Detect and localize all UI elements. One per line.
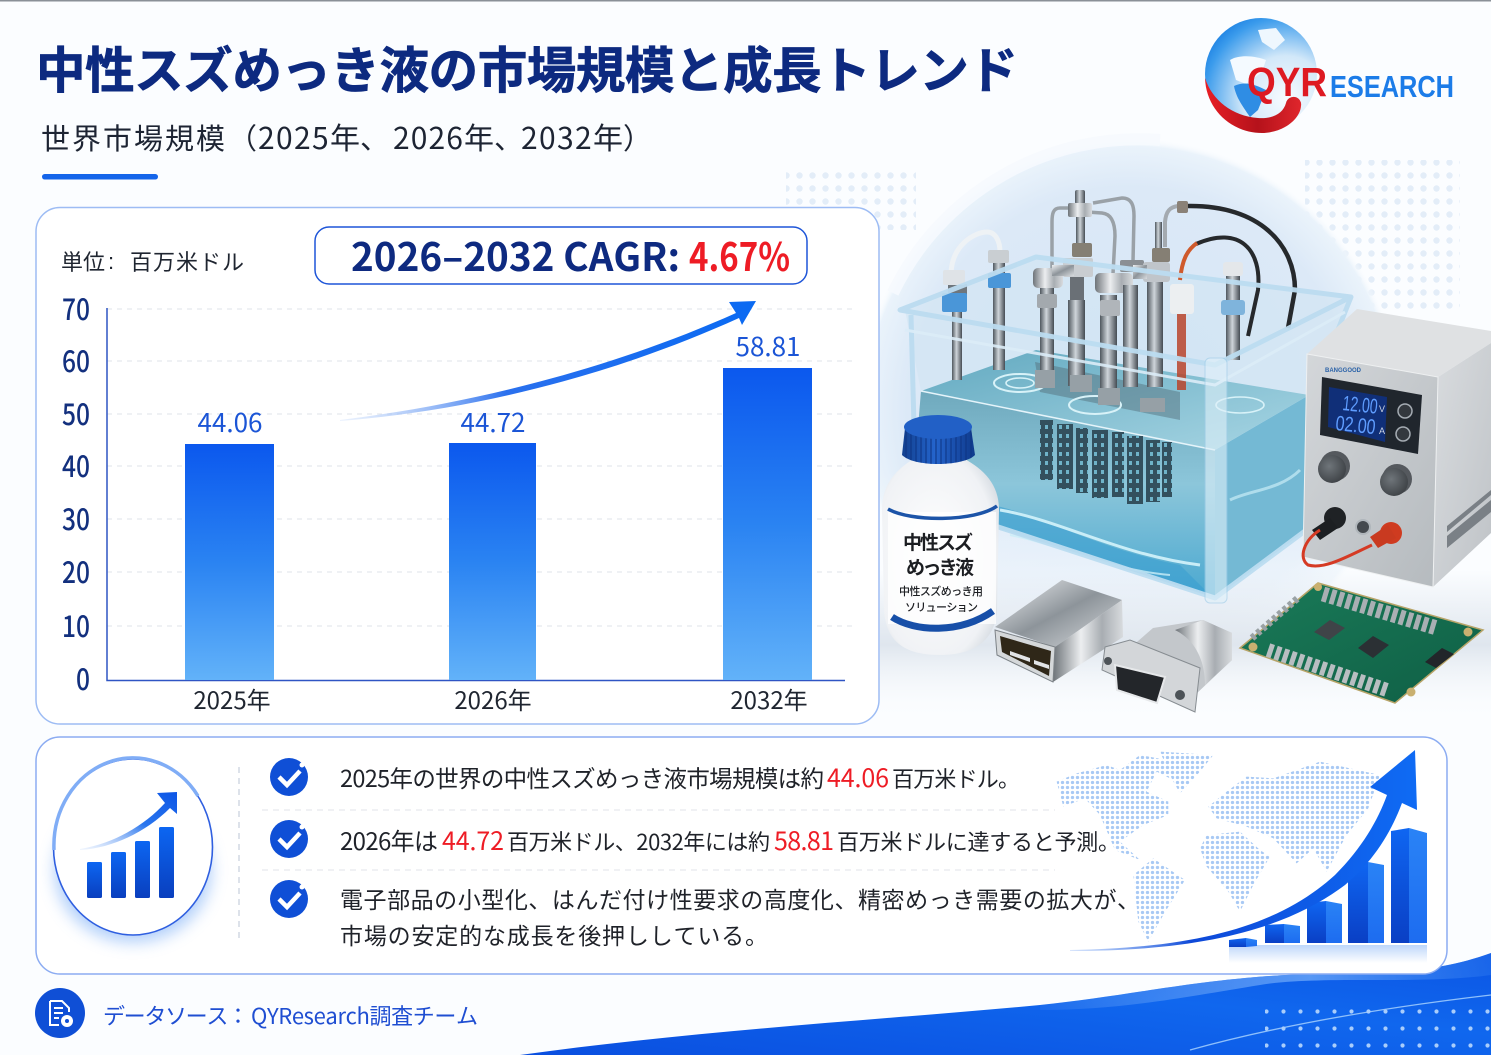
digital display: 12.00 — [1341, 392, 1379, 419]
takeaway 3: 電子部品の小型化、はんだ付け性要求の高度化、精密めっき需要の拡大が、 — [340, 881, 1140, 915]
big arrow — [1070, 750, 1417, 951]
panel: market size chart — [36, 208, 879, 724]
bar 1 — [1229, 938, 1257, 947]
takeaway 2: 百万米ドルに達すると予測。 — [837, 825, 1120, 857]
y axis labels: 60 — [62, 339, 90, 381]
subtitle: 2032年 — [521, 114, 623, 158]
title: 中性スズめっき液の市場規模と成長トレンド — [36, 32, 1018, 103]
CAGR pill: 4.67% — [689, 227, 790, 283]
bottle text — [899, 528, 983, 615]
logo globe — [1205, 18, 1317, 130]
logo red swoosh — [1205, 78, 1301, 133]
bar: 2025: 2025年 — [193, 681, 271, 716]
takeaway 3: 市場の安定的な成長を後押ししている。 — [340, 917, 768, 951]
electrode rods — [1033, 190, 1170, 412]
icon: check 1 — [270, 758, 308, 796]
bar 4 — [1348, 862, 1384, 943]
takeaway 1: 44.06 — [827, 759, 889, 795]
takeaway 3 — [340, 881, 1140, 951]
digital display: 02.00 — [1334, 412, 1377, 439]
bar: 2026 — [449, 403, 536, 716]
world map dots — [1057, 752, 1380, 942]
rising bars and arrow — [1070, 750, 1427, 963]
subtitle: 2025年 — [258, 114, 360, 158]
subtitle: （ — [228, 116, 257, 158]
power supply — [1303, 309, 1491, 587]
unit label: 百万米ドル — [130, 245, 244, 277]
digital display — [1320, 377, 1422, 454]
bottle bands — [888, 506, 997, 518]
takeaway 2: 百万米ドル、2032年には約 — [507, 825, 770, 857]
icon: check 2 — [270, 820, 308, 858]
subtitle: 世界市場規模 — [41, 116, 225, 158]
bar: 2026: 44.72 — [461, 403, 525, 440]
bar 3 — [1307, 901, 1342, 943]
footer wave — [520, 953, 1491, 1055]
unit label: : — [108, 249, 114, 274]
takeaway 2: 2026年は — [340, 822, 438, 857]
takeaway 1: 百万米ドル。 — [892, 762, 1020, 794]
bar: 2025: 44.06 — [198, 403, 262, 440]
bottle text: めっき液 — [906, 553, 974, 580]
axes — [107, 308, 845, 680]
unit label: 単位 — [61, 245, 105, 277]
subtitle underline — [42, 174, 158, 180]
y axis labels: 10 — [62, 604, 90, 646]
y axis labels: 20 — [62, 550, 90, 592]
takeaway 2 — [340, 822, 1120, 858]
grid lines — [107, 309, 852, 626]
takeaway 2: 58.81 — [774, 822, 834, 858]
knobs — [1320, 451, 1350, 481]
takeaway 1 — [340, 759, 1020, 795]
takeaway 2: 44.72 — [442, 822, 504, 858]
plating tank — [900, 190, 1351, 603]
digital display: V — [1379, 404, 1385, 414]
bar: 2032: 2032年 — [730, 681, 808, 716]
terminals — [1324, 507, 1346, 529]
power supply: BANGGOOD — [1325, 368, 1362, 374]
connector: USB shell — [995, 580, 1123, 682]
background halo — [850, 138, 1491, 720]
CAGR pill — [315, 227, 807, 284]
connector: D-sub — [1102, 620, 1232, 712]
y axis labels: 40 — [62, 444, 90, 486]
data source: データソース： — [103, 999, 249, 1031]
icon: check 3 — [270, 880, 308, 918]
CAGR pill: 2026–2032 CAGR: — [351, 227, 680, 283]
y axis labels: 50 — [62, 392, 90, 434]
bottle text: ソリューション — [905, 599, 978, 615]
subtitle: 2026年 — [393, 114, 494, 158]
logo: QYResearch — [1205, 18, 1454, 133]
logo: QYResearch: ESEARCH — [1330, 69, 1454, 104]
subtitle: 、 — [360, 116, 389, 158]
subtitle — [41, 114, 652, 158]
bar: 2032 — [723, 327, 812, 716]
white tube — [951, 232, 1000, 275]
tank glass frame — [900, 257, 1351, 598]
digital display: A — [1379, 426, 1385, 436]
side fittings — [942, 250, 1245, 380]
bottle: product label — [882, 415, 999, 655]
circuit board — [1240, 583, 1483, 703]
icon: data source document — [35, 988, 85, 1038]
bar: 2025 — [185, 403, 274, 716]
subtitle: ） — [623, 116, 652, 158]
unit label — [61, 245, 244, 277]
cables — [1165, 201, 1295, 390]
y axis labels: 30 — [62, 497, 90, 539]
water surface — [921, 350, 1309, 450]
takeaway 1: 2025年の世界の中性スズめっき液市場規模は約 — [340, 760, 824, 794]
vertical divider — [238, 767, 240, 940]
halftone decoration — [786, 160, 1460, 310]
subtitle: 、 — [494, 116, 523, 158]
bottle text: 中性スズ — [903, 528, 973, 555]
panel: key takeaways — [36, 737, 1447, 974]
immersed mesh plates — [1040, 420, 1172, 504]
bottle text: 中性スズめっき用 — [899, 583, 983, 599]
bar 5 — [1391, 828, 1427, 943]
y axis labels — [62, 287, 90, 699]
bar 2 — [1265, 924, 1300, 943]
bar: 2032: 58.81 — [736, 327, 800, 364]
panel: product photo illustration — [850, 138, 1491, 720]
y axis labels: 70 — [62, 287, 90, 329]
icon: growth chart badge — [54, 758, 212, 942]
growth arrow — [340, 301, 756, 421]
data source: QYResearch調査チーム — [251, 999, 478, 1031]
logo wordmark: QYR — [1247, 59, 1327, 105]
y axis labels: 0 — [76, 657, 90, 699]
bar: 2026: 2026年 — [454, 681, 532, 716]
data source — [103, 999, 478, 1031]
